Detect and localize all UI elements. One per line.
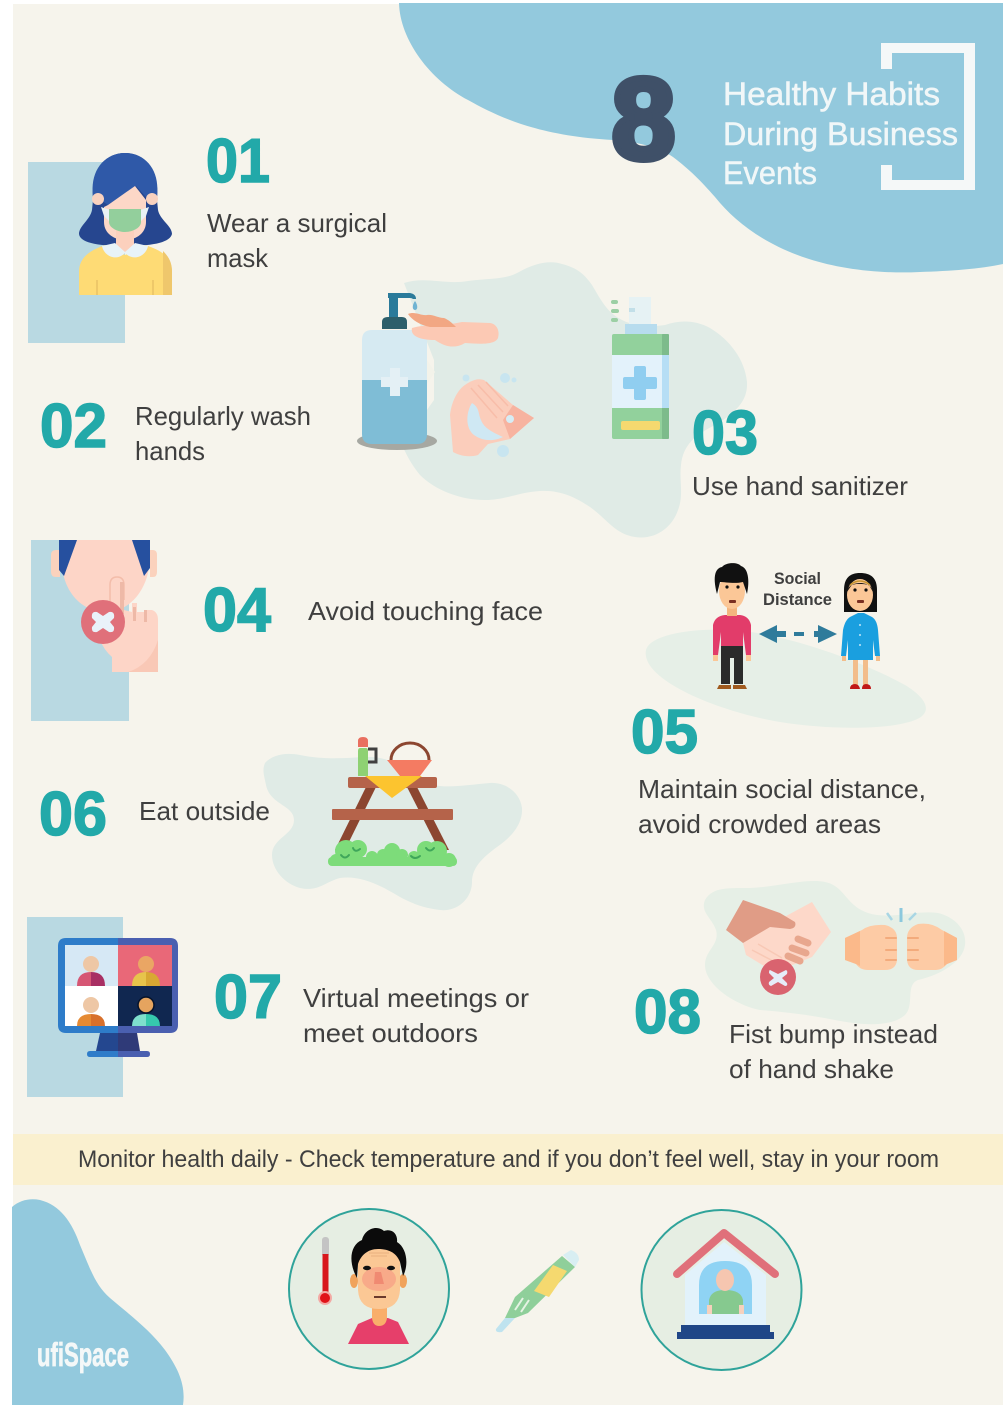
number 02: 02 (40, 392, 107, 461)
number 08: 08 (634, 978, 701, 1047)
label 07 (303, 983, 529, 1048)
icon: fist bump (845, 908, 957, 970)
label 02: hands (135, 436, 205, 466)
label 04: Avoid touching face (308, 596, 543, 626)
icon: woman (841, 573, 880, 689)
blob behind picnic table (263, 754, 522, 910)
label 02: Regularly wash (135, 401, 311, 431)
label 07: meet outdoors (303, 1018, 478, 1048)
icon: hand under pump (408, 313, 499, 347)
title: big number 8: 8 (612, 54, 676, 184)
panel: habit 02 (40, 293, 534, 466)
number 04: 04 (203, 576, 272, 645)
title: heading (723, 76, 958, 191)
text: Social Distance: Social (774, 569, 821, 588)
number 07: 07 (214, 963, 282, 1032)
panel: habit 07 (27, 917, 529, 1097)
label 05: avoid crowded areas (638, 809, 881, 839)
icon: sick person in circle (289, 1209, 449, 1369)
number 03: 03 (692, 399, 758, 468)
header blob (399, 3, 1003, 272)
panel: habit 08 (634, 881, 965, 1084)
title: heading: Events (723, 155, 817, 191)
thermometer (318, 1237, 332, 1305)
title: heading: Healthy Habits (723, 76, 940, 112)
label 03: Use hand sanitizer (692, 471, 908, 501)
number 06: 06 (39, 780, 107, 849)
panel: habit 01 (28, 127, 387, 343)
icon: woman wearing mask (79, 153, 172, 295)
footer blob with logo (12, 1199, 184, 1405)
icon: person staying home in circle (642, 1210, 802, 1370)
banner: monitor health daily (13, 1134, 1003, 1185)
label 01: mask (207, 243, 269, 273)
text: Social Distance (763, 569, 832, 609)
icon: man (713, 563, 751, 689)
blob behind hygiene icons (402, 262, 747, 537)
number 01: 01 (206, 127, 270, 196)
text: Social Distance: Distance (763, 590, 832, 609)
label 05: Maintain social distance, (638, 774, 926, 804)
label 01: Wear a surgical (207, 208, 387, 238)
icon: monitor with video call (58, 938, 178, 1057)
logo: ufiSpace: ufiSpace (37, 1336, 129, 1373)
panel: habit 03 (611, 297, 908, 501)
icon: hand touching face (51, 540, 158, 672)
banner: monitor health daily: Monitor health daily - Check temperature and if you don’t feel well, stay in your room (78, 1146, 939, 1173)
arrow: two-way dashed (759, 625, 837, 643)
label 08: of hand shake (729, 1054, 894, 1084)
blob behind hands (704, 881, 965, 1024)
label 06: Eat outside (139, 796, 270, 826)
icon: digital thermometer (496, 1250, 579, 1332)
label 05 (638, 774, 926, 839)
label 08: Fist bump instead (729, 1019, 938, 1049)
icon: soap pump bottle (357, 293, 437, 450)
title bracket (881, 43, 975, 190)
label 07: Virtual meetings or (303, 983, 529, 1013)
label 02 (135, 401, 311, 466)
icon: washing hands (450, 373, 534, 457)
panel: habit 05 (631, 563, 926, 839)
icon: picnic table (328, 737, 457, 867)
icon: hand sanitizer bottle (611, 297, 669, 439)
label 08 (729, 1019, 938, 1084)
label 01 (207, 208, 387, 273)
panel: habit 06 (39, 737, 522, 910)
number 05: 05 (631, 698, 698, 767)
panel: habit 04 (31, 540, 543, 721)
title: heading: During Business (723, 116, 958, 152)
icon: handshake crossed out (726, 900, 831, 995)
ground blob (646, 630, 926, 728)
